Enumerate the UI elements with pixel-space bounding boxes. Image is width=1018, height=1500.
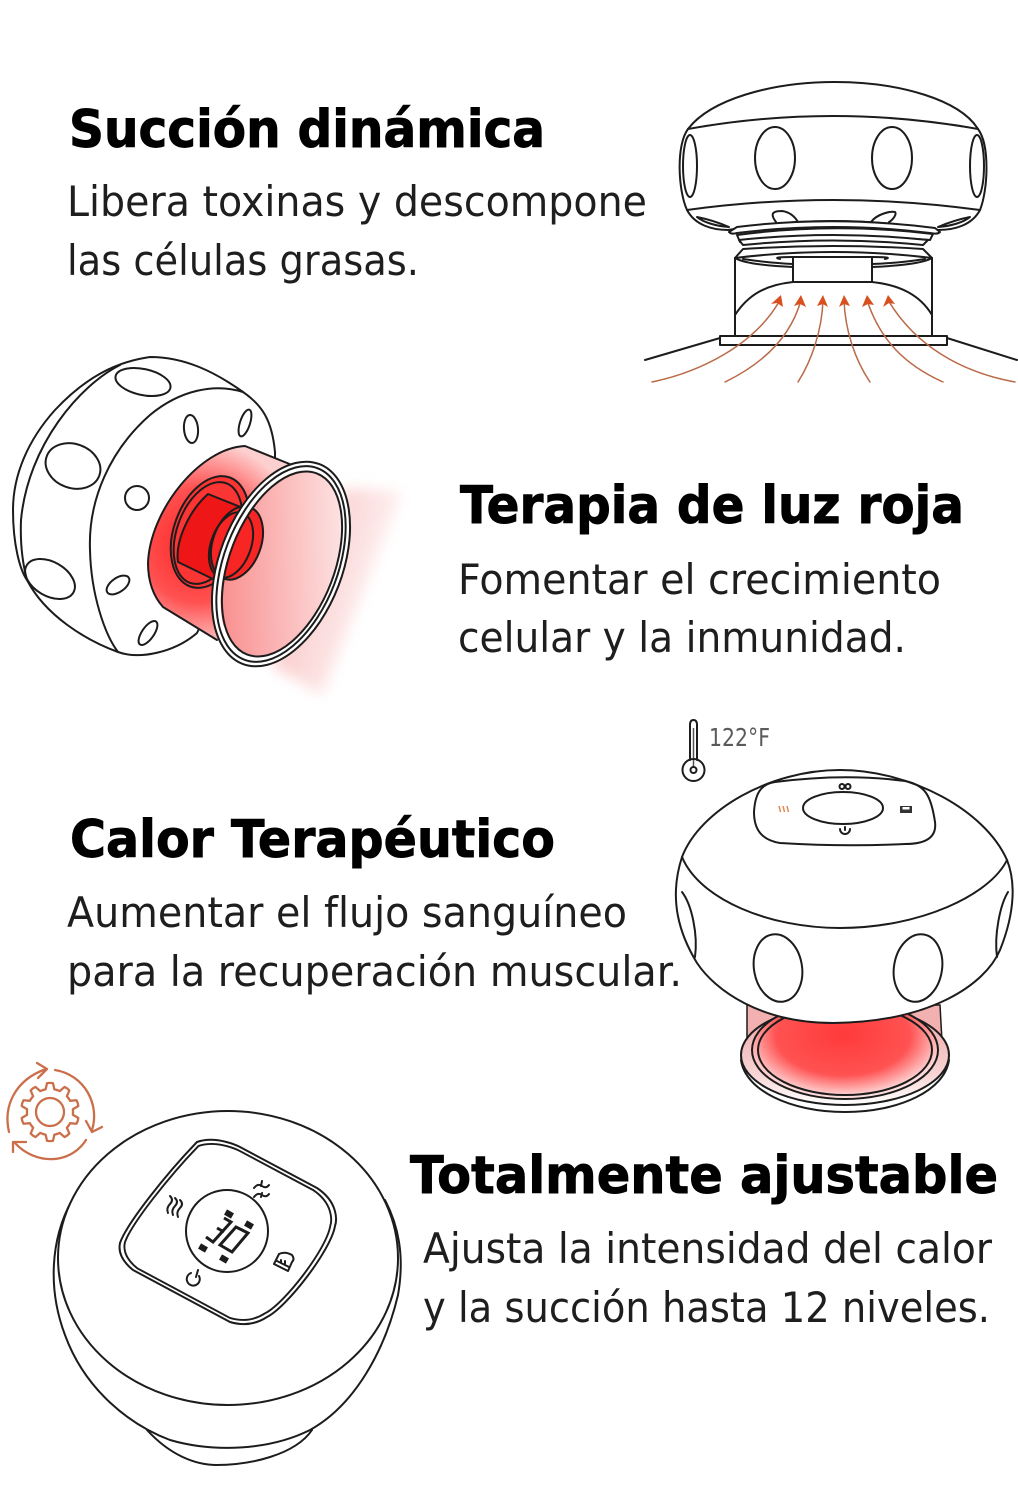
text block: terapia description: celular y la inmunidad. — [458, 613, 906, 662]
illustration: device with heat glow — [676, 770, 1013, 1112]
text block: calor description — [67, 888, 682, 996]
heading: terapia de luz roja: Terapia de luz roja — [460, 476, 964, 536]
cup mouth — [199, 456, 365, 672]
panel: succión dinámica text — [67, 100, 647, 285]
heading: totalmente ajustable: Totalmente ajustable — [410, 1146, 998, 1206]
panel: totalmente ajustable text — [410, 1146, 998, 1332]
illustration: device top view with display — [54, 1111, 401, 1465]
panel: calor terapéutico text — [67, 810, 682, 996]
text block: ajustable description: Ajusta la intensidad del calor — [423, 1224, 993, 1273]
text block: terapia description — [458, 555, 941, 662]
neck flanges — [729, 221, 940, 264]
arrows: suction flow — [652, 295, 1015, 382]
control panel — [754, 777, 935, 845]
text block: calor description: Aumentar el flujo sanguíneo — [67, 888, 627, 937]
inner nozzle — [156, 465, 273, 599]
text block: calor description: para la recuperación muscular. — [67, 947, 682, 996]
icon: power button — [187, 1270, 200, 1286]
icon: rotating gear — [8, 1063, 102, 1159]
text block: succión description — [67, 177, 647, 285]
illustration: device side view with suction arrows — [645, 82, 1017, 382]
icon: suction waves — [254, 1181, 269, 1197]
text block: terapia description: Fomentar el crecimiento — [458, 555, 941, 604]
heat glow base — [747, 1005, 943, 1060]
icon: thermometer with 122°F: 122°F — [709, 723, 770, 752]
heading: calor terapéutico: Calor Terapéutico — [70, 810, 555, 870]
icon: heat waves — [167, 1196, 182, 1217]
cup rim — [185, 442, 377, 686]
red light beam — [272, 488, 402, 695]
control panel with double outline — [120, 1140, 336, 1324]
text block: succión description: Libera toxinas y descompone — [67, 177, 647, 226]
icon: thermometer with 122°F — [682, 720, 770, 781]
heading: succión dinámica: Succión dinámica — [69, 100, 545, 160]
panel: terapia de luz roja text — [458, 476, 964, 662]
icon: mode button — [274, 1253, 294, 1271]
text block: succión description: las células grasas. — [67, 236, 419, 285]
red cup body — [148, 446, 300, 640]
display digits — [206, 1218, 248, 1252]
text block: ajustable description — [423, 1224, 993, 1332]
illustration: device angled with red light — [13, 357, 402, 695]
